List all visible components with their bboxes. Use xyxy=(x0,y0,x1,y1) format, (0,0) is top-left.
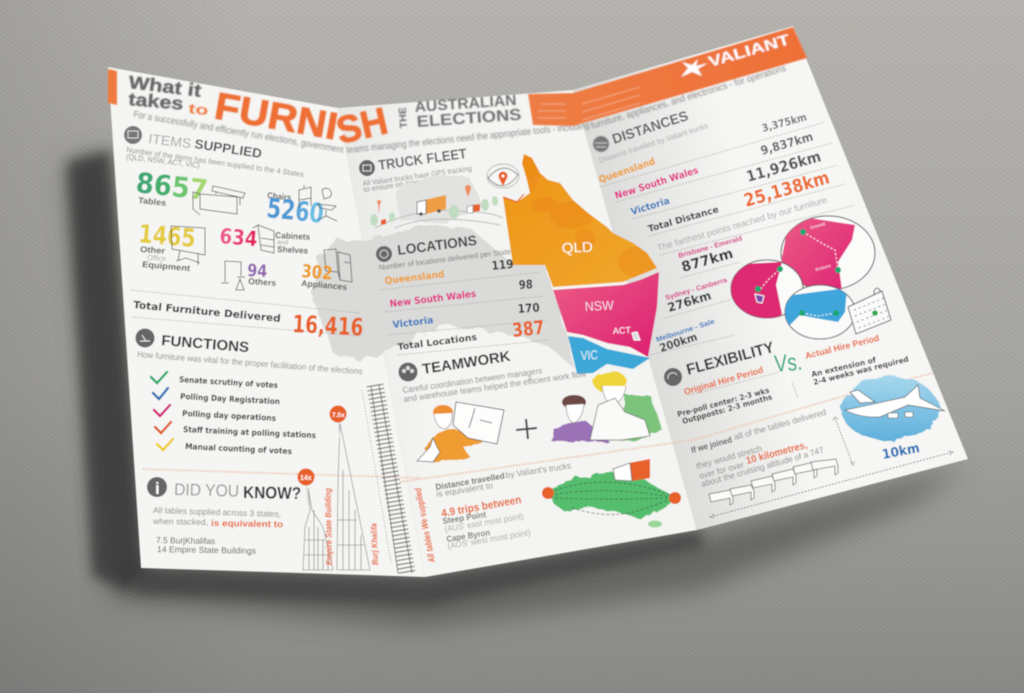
title: furnish: SH xyxy=(333,100,392,153)
subtitle: teams managing the elections need the appropriate tools - including xyxy=(346,120,590,156)
icon: whiteboard xyxy=(171,226,205,265)
marker: 14x: 14x xyxy=(300,475,312,482)
stretched tables text: all of the tables delivered xyxy=(733,407,827,442)
description: How furniture was vital for the proper facilitation of the elections xyxy=(137,349,363,376)
row: nsw distance: New South Wales xyxy=(614,165,700,202)
state: Queensland: QLD xyxy=(561,238,593,256)
state: Queensland xyxy=(503,152,662,287)
heading: teamwork: TEAMWORK xyxy=(421,349,512,378)
total furniture delivered: Total Furniture Delivered xyxy=(133,300,281,325)
row: victoria: 170 xyxy=(517,300,540,316)
stat: cabinets and shelves xyxy=(219,224,311,256)
icon: large truck xyxy=(417,195,446,216)
row: victoria xyxy=(392,300,540,331)
state: New South Wales: NSW xyxy=(584,297,615,314)
stat: other office equipment: Office xyxy=(147,253,166,263)
description: Number of locations delivered per State xyxy=(378,247,511,272)
equivalent text: 14 Empire State Buildings xyxy=(157,544,256,556)
map: Australian states xyxy=(503,152,662,374)
panel: distances xyxy=(593,107,891,395)
column: original hire period xyxy=(676,365,774,426)
paper: left panel xyxy=(108,67,425,577)
row: total distance: 25,138km xyxy=(742,167,832,212)
equivalent text xyxy=(152,505,284,556)
icon: row of tables xyxy=(709,459,838,505)
illustration: managers xyxy=(550,371,662,442)
logo wordmark: VALIANT xyxy=(706,31,792,71)
function list: Senate scrutiny of votes xyxy=(179,375,278,390)
distance text: 4.9 trips between xyxy=(440,494,523,520)
icon: empire state building xyxy=(303,488,333,570)
heading: flexibility: FLEXIBILITY xyxy=(685,339,777,379)
icon: items xyxy=(124,126,142,144)
row: total distance xyxy=(647,167,832,235)
icon: people xyxy=(398,362,418,382)
icon: destination dot xyxy=(669,492,681,504)
stat: other office equipment: 1465 xyxy=(137,219,197,253)
row: victoria distance: 11,926km xyxy=(744,147,823,186)
description: Number of the items has been supplied to the 4 States xyxy=(126,145,304,179)
marker: 14x xyxy=(298,468,314,505)
stat: others xyxy=(221,261,277,290)
arrow: height xyxy=(833,417,855,465)
column: actual hire period xyxy=(804,333,910,387)
heading: items supplied: SUPPLIED xyxy=(194,136,263,161)
icon: stacked tables xyxy=(371,385,412,573)
row: victoria distance xyxy=(630,147,823,218)
icon: info: i xyxy=(155,479,160,498)
icon: burj khalifa xyxy=(337,423,370,570)
icon: checks xyxy=(151,372,173,450)
distance text xyxy=(435,460,572,551)
title: what it takes to: to xyxy=(188,100,209,118)
row: nsw distance xyxy=(614,130,815,202)
title: what it takes to: What it xyxy=(128,72,202,101)
grey watercolor map of western Australia xyxy=(312,225,574,368)
icon: distances xyxy=(593,136,609,152)
header accent bar xyxy=(108,69,117,105)
stat: cabinets and shelves: and xyxy=(277,239,289,247)
row: victoria: Victoria xyxy=(392,315,434,331)
stretched tables text xyxy=(690,407,827,489)
function list: Staff training at polling stations xyxy=(183,425,316,440)
state: New South Wales: ACT xyxy=(613,325,632,336)
subtitle: furniture, appliances, and electronics - for operations xyxy=(590,63,788,132)
distance text: by Valiant's trucks xyxy=(505,460,572,480)
distance text: Steep Point xyxy=(442,509,487,526)
row: total locations xyxy=(397,317,545,353)
row: nsw distance: 9,837km xyxy=(759,130,815,158)
marker: 7.5x: 7.5x xyxy=(332,412,345,419)
heading: locations: LOCATIONS xyxy=(396,232,478,258)
heading: truck fleet: TRUCK FLEET xyxy=(377,145,468,173)
route: melbourne sale xyxy=(655,318,716,355)
stat: tables xyxy=(134,166,245,215)
row: victoria distance: Victoria xyxy=(630,196,671,218)
stat: chairs: 5260 xyxy=(265,193,325,230)
row: queensland xyxy=(384,257,514,287)
row: queensland distance xyxy=(597,111,808,186)
panel: locations xyxy=(376,232,550,355)
stretched tables text: about the cruising altitude of a 747 xyxy=(700,445,825,489)
stretched tables text: If we joined xyxy=(690,434,733,455)
panel: truck fleet xyxy=(359,145,519,228)
route: brisbane emerald: Brisbane - Emerald xyxy=(678,235,743,260)
stat: appliances: 302 xyxy=(301,261,333,285)
icon: small truck xyxy=(467,204,480,213)
magnifier: emerald brisbane: Brisbane xyxy=(815,263,832,272)
equivalent text: 7.5 BurjKhalifas xyxy=(156,535,215,546)
function list: Polling Day Registration xyxy=(180,392,281,406)
row: new south wales: 98 xyxy=(518,277,533,292)
title: furnish: FURNI xyxy=(211,86,341,148)
distance text: (AUS' east most point) xyxy=(444,511,524,534)
icon: origin dot xyxy=(542,487,554,499)
stretched tables text: 10 kilometres, xyxy=(745,440,809,467)
function list: Manual counting of votes xyxy=(185,442,292,456)
column: original hire period: Pre-poll center: 2-3 wks xyxy=(676,386,771,419)
state: Victoria xyxy=(568,336,650,374)
row: total locations: 387 xyxy=(511,317,545,342)
label: 10km: 10km xyxy=(881,441,921,463)
farthest points caption: The farthest points reached by our furniture. xyxy=(656,194,831,253)
total furniture delivered xyxy=(133,300,364,342)
column: original hire period: Outpposts: 2-3 months xyxy=(681,392,774,426)
icon: chairs xyxy=(299,185,337,221)
row: new south wales: New South Wales xyxy=(389,289,477,310)
stat: others: Others xyxy=(248,276,277,288)
icon: gps eye xyxy=(487,164,519,188)
panel: flexibility xyxy=(664,333,953,518)
icon: pins xyxy=(377,185,471,214)
stat: other office equipment: Equipment xyxy=(142,259,191,273)
stat: cabinets and shelves: Shelves xyxy=(277,244,309,256)
heading: did you know: DID YOU xyxy=(174,480,239,501)
column: original hire period: Original Hire Period xyxy=(683,365,764,397)
title: the australian elections xyxy=(398,92,522,131)
icon: fridge xyxy=(324,249,352,282)
distance text: Distance travelled xyxy=(435,471,505,492)
title: the australian elections: AUSTRALIAN xyxy=(414,92,517,116)
panel: teamwork xyxy=(398,349,933,564)
icon: table xyxy=(193,186,245,215)
icon: plus sign xyxy=(516,419,537,439)
magnifier: emerald brisbane xyxy=(781,215,875,300)
description: to ensure on-time delivery xyxy=(363,173,447,194)
subtitle xyxy=(132,63,788,156)
stat: cabinets and shelves: Cabinets xyxy=(275,230,311,242)
route: melbourne sale: Melbourne - Sale xyxy=(655,318,716,344)
panel: items supplied xyxy=(124,126,364,342)
distance text: Cape Byron xyxy=(446,527,491,544)
title: the australian elections: ELECTIONS xyxy=(416,107,522,131)
panel: did you know xyxy=(147,385,412,573)
panel: functions xyxy=(136,328,420,478)
state: New South Wales xyxy=(553,272,659,357)
heading: functions: FUNCTIONS xyxy=(161,333,250,356)
route: sydney canberra xyxy=(665,277,728,315)
route: melbourne sale: 200km xyxy=(658,330,699,355)
row: total locations: Total Locations xyxy=(397,333,478,353)
magnifier: sydney canberra xyxy=(730,259,804,319)
stat: other office equipment: Other xyxy=(140,244,166,256)
stretched tables text: they would stretch xyxy=(695,443,763,471)
stat: tables: Tables xyxy=(138,195,167,208)
stretched tables text: over for over xyxy=(698,459,745,481)
equivalent text: All tables supplied across 3 states, xyxy=(153,505,281,519)
row: queensland: 119 xyxy=(491,257,514,273)
icon: stanchions xyxy=(221,261,245,290)
illustration: warehouse worker xyxy=(417,402,504,462)
label: empire state building: Empire State Building xyxy=(323,487,334,565)
title: the australian elections: THE xyxy=(398,106,410,129)
state: Victoria: VIC xyxy=(580,347,598,363)
stat: tables: 8657 xyxy=(134,166,209,207)
versus mark: Vs. xyxy=(773,349,803,378)
label: burj khalifa: Burj Khalifa xyxy=(369,523,380,565)
heading: items supplied xyxy=(148,131,263,161)
magnifier: melbourne sale xyxy=(785,285,855,339)
row: queensland distance: 3,375km xyxy=(761,111,808,135)
stat: appliances: Appliances xyxy=(301,278,348,292)
heading: did you know: KNOW? xyxy=(243,483,301,503)
function list xyxy=(179,375,316,456)
title: furnish xyxy=(211,86,392,153)
heading: did you know xyxy=(174,480,301,503)
description: (QLD, NSW, ACT, VIC) xyxy=(126,152,201,170)
stat: others: 94 xyxy=(247,261,268,282)
banner with Valiant logo xyxy=(528,27,807,126)
icon: functions xyxy=(136,328,154,348)
description: and warehouse teams helped the efficient work flow xyxy=(403,368,587,404)
total furniture delivered: 16,416 xyxy=(292,310,364,342)
map: australia green route xyxy=(542,459,681,528)
description: Careful coordination between managers xyxy=(402,365,543,395)
column: actual hire period: 2-4 weeks was required xyxy=(812,354,910,387)
stat: other office equipment xyxy=(137,219,205,273)
description: Distance travelled by Valiant trucks xyxy=(598,121,709,165)
equivalent text: is equivalent to xyxy=(211,518,284,529)
stat: appliances xyxy=(301,249,352,292)
icon: cabinet xyxy=(253,225,274,253)
icon: trees xyxy=(370,196,498,226)
description: All Valiant trucks have GPS tracking xyxy=(362,164,472,188)
label: all tables we supplied: All tables We supplied xyxy=(413,487,437,564)
magnifier: emerald brisbane: Emerald xyxy=(810,221,826,230)
subtitle: For a successfully and efficiently run elections, government xyxy=(132,109,345,156)
column: actual hire period: Actual Hire Period xyxy=(804,333,880,361)
row: new south wales xyxy=(389,277,533,310)
row: total distance: Total Distance xyxy=(647,205,720,235)
arrow: length xyxy=(710,451,953,518)
row: queensland distance: Queensland xyxy=(597,156,657,186)
distance text: (AUS' west most point) xyxy=(447,527,531,551)
paper: middle panel xyxy=(338,90,697,577)
icon: horse logo xyxy=(681,59,708,77)
heading: distances: DISTANCES xyxy=(610,107,690,147)
paper: right panel xyxy=(573,26,968,530)
stat: chairs: Chairs xyxy=(267,190,292,203)
route: sydney canberra: Sydney - Canberra xyxy=(665,277,728,302)
icon: truck on map xyxy=(613,459,650,481)
route: brisbane emerald: 877km xyxy=(680,246,735,276)
route: brisbane emerald xyxy=(678,235,743,276)
heading: items supplied: ITEMS xyxy=(148,131,192,151)
brochure xyxy=(108,26,968,577)
icon: info xyxy=(147,477,167,498)
icon: flexibility xyxy=(664,368,682,386)
equivalent text: when stacked, xyxy=(152,516,208,527)
route: sydney canberra: 276km xyxy=(666,288,713,315)
row: queensland: Queensland xyxy=(384,269,445,287)
icon: calendar xyxy=(848,288,891,334)
header xyxy=(108,27,807,156)
distance text: is equivalent to xyxy=(436,480,494,499)
marker: 7.5x xyxy=(330,406,346,440)
illustration: 747 plane in cloud xyxy=(841,377,945,441)
icon: truck xyxy=(359,160,375,176)
stat: cabinets and shelves: 634 xyxy=(219,224,259,251)
function list: Polling day operations xyxy=(182,409,276,423)
icon: locations xyxy=(376,246,392,262)
icon: carried box xyxy=(453,402,504,444)
title: what it takes to xyxy=(128,72,209,118)
illustration: truck route xyxy=(370,176,503,228)
column: actual hire period: An extension of xyxy=(810,355,877,379)
title: what it takes to: takes xyxy=(128,89,184,114)
